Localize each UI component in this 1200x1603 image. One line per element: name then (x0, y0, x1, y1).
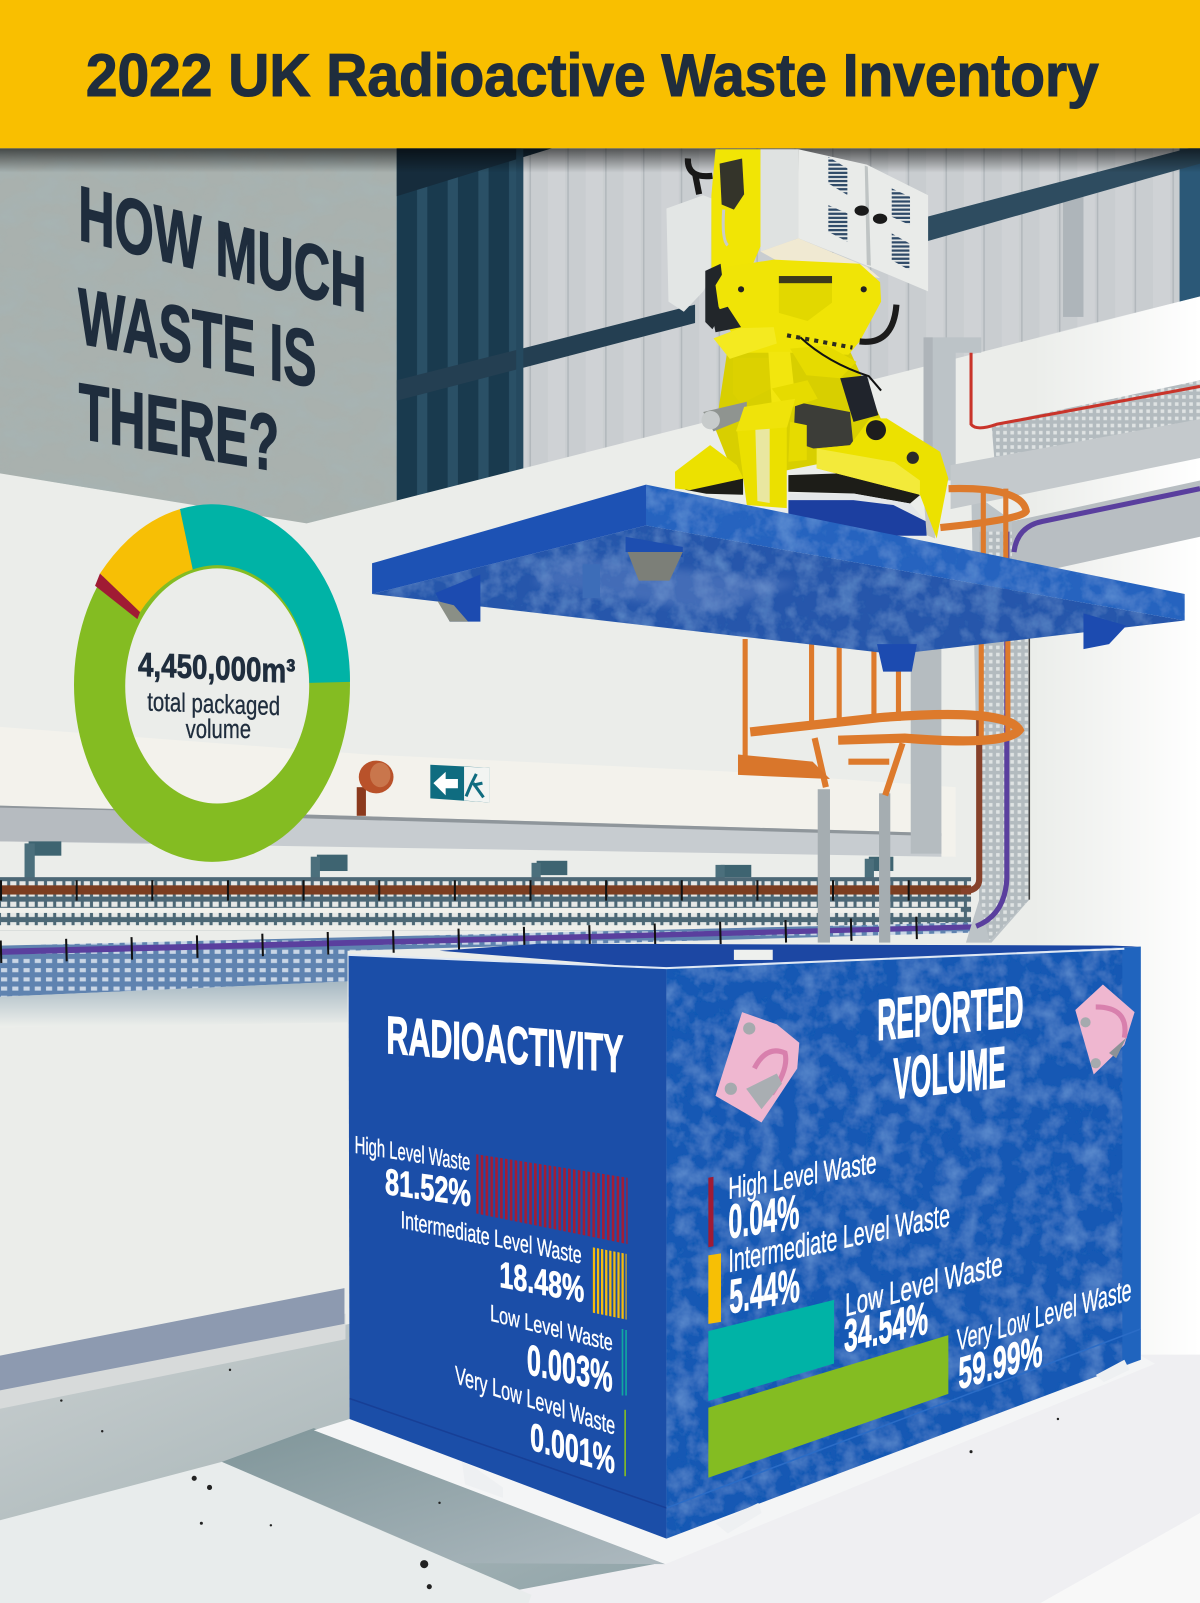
base bracket right (1096, 1360, 1129, 1382)
floor (0, 1288, 1200, 1603)
orange cage bracket (738, 754, 830, 779)
very low level waste stat: Very Low Level Waste (455, 1360, 615, 1441)
donut centre label: 4,450,000m³ (138, 646, 295, 691)
donut centre label: total packaged (147, 687, 280, 721)
wall heading: how much waste is there: HOW MUCH (78, 169, 367, 329)
silver cable tray (0, 806, 941, 883)
upper right cable trays (928, 337, 1200, 583)
plate pin (583, 564, 600, 598)
base bracket centre (716, 1503, 761, 1533)
hook right (1075, 984, 1135, 1074)
donut segment: low level waste (180, 504, 350, 683)
intermediate level waste stat: Intermediate Level Waste (728, 1197, 950, 1280)
vertical cable tray (925, 337, 1029, 943)
heading: radioactivity: RADIOACTIVITY (386, 1006, 624, 1084)
intermediate level waste stat (401, 1207, 627, 1320)
wall heading: how much waste is there (78, 169, 367, 489)
donut chart: total packaged volume (74, 504, 350, 862)
wall heading: how much waste is there: WASTE IS (78, 272, 316, 405)
upper building cladding and window (397, 145, 1200, 526)
title banner (0, 0, 1200, 148)
blue crate (349, 944, 1141, 1539)
robot control box (760, 149, 928, 291)
intermediate level waste stat: 18.48% (499, 1253, 584, 1310)
exit sign (430, 765, 490, 803)
high level waste stat: 81.52% (385, 1161, 471, 1214)
orange access cage (745, 489, 1026, 795)
high level waste stat (708, 1145, 877, 1249)
perforated horizontal cable trays (0, 877, 981, 1027)
robot hub (711, 260, 896, 359)
very low level waste stat: 59.99% (958, 1324, 1043, 1399)
intermediate level waste stat: Intermediate Level Waste (401, 1207, 582, 1270)
low level waste stat: Low Level Waste (490, 1300, 613, 1357)
robot side box (666, 195, 711, 312)
intermediate level waste stat (708, 1197, 950, 1324)
high level waste stat: High Level Waste (355, 1132, 470, 1177)
intermediate level waste stat: 5.44% (729, 1258, 800, 1324)
robot arm (666, 149, 948, 538)
low level waste stat: 34.54% (844, 1292, 928, 1362)
very low level waste stat: 0.001% (530, 1415, 615, 1483)
crate volume face (666, 947, 1141, 1539)
robot gripper (675, 399, 948, 538)
header shadow (0, 148, 1200, 173)
donut centre label: volume (186, 714, 251, 744)
panel: reported volume: REPORTED (877, 974, 1023, 1053)
high level waste stat: 0.04% (728, 1185, 799, 1249)
title: 2022 UK Radioactive Waste Inventory (86, 41, 1099, 109)
very low level waste stat (455, 1360, 625, 1483)
donut segment: high level waste (95, 574, 140, 619)
low level waste stat (708, 1246, 1003, 1401)
very low level waste stat (708, 1272, 1132, 1478)
low level waste stat: 0.003% (527, 1336, 613, 1402)
donut segment: very low level waste (74, 508, 350, 862)
robot lower body backing (716, 348, 889, 480)
floor bolts (60, 1369, 1059, 1589)
blue lifting plate (372, 485, 1185, 672)
fire alarm sounder (357, 761, 394, 816)
white wall upper edge (0, 296, 1200, 1370)
crate interior (440, 944, 1140, 969)
panel: radioactivity (355, 1006, 628, 1483)
robot wrist and linkage (701, 337, 881, 448)
plate foot right (1083, 613, 1126, 649)
high level waste stat (355, 1132, 628, 1244)
concrete pillar (0, 148, 397, 523)
silver column and ladder rails (818, 644, 941, 943)
low level waste stat (490, 1300, 626, 1402)
heading: reported volume (877, 974, 1023, 1112)
heading: reported volume: VOLUME (893, 1035, 1006, 1112)
donut centre label (138, 646, 295, 744)
robot upper arm (705, 149, 767, 329)
panel: reported volume (708, 974, 1132, 1478)
hook left (716, 1012, 799, 1123)
low level waste stat: Low Level Waste (845, 1246, 1003, 1325)
crate radioactivity face (349, 955, 666, 1539)
wall heading: how much waste is there: THERE? (79, 367, 279, 489)
high level waste stat: High Level Waste (728, 1145, 877, 1206)
wall ledge (0, 727, 956, 857)
plate foot front (877, 644, 917, 672)
donut segment: intermediate level waste (100, 509, 193, 612)
base bracket left (462, 1462, 503, 1498)
crate base plate (314, 1356, 1155, 1564)
plate foot centre (626, 537, 683, 581)
plate foot left (435, 575, 480, 622)
right wall brightening (1032, 296, 1200, 1380)
